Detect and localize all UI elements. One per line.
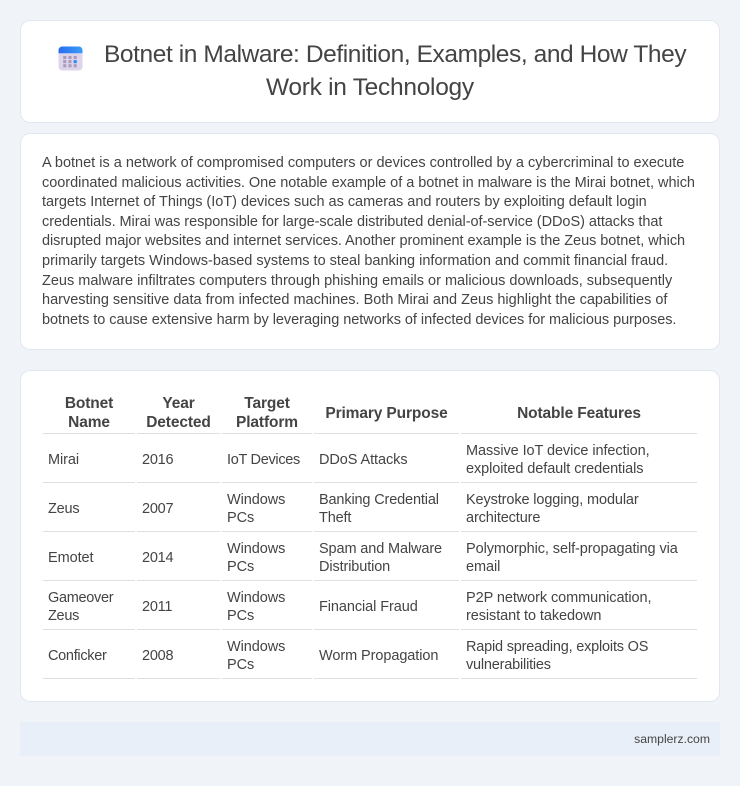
row: Emotet: Windows [227, 541, 285, 557]
row: Mirai [48, 443, 650, 477]
table header: Platform [236, 414, 298, 431]
row: Mirai: Mirai [48, 452, 79, 468]
row: Gameover Zeus: P2P network communication, [466, 590, 651, 606]
table header: Target [244, 395, 290, 412]
footer [20, 722, 720, 756]
row: Zeus: architecture [466, 510, 540, 526]
row: Conficker [48, 639, 648, 673]
row: Conficker: Windows [227, 639, 285, 655]
row: Zeus: Keystroke logging, modular [466, 492, 639, 508]
table header: Notable Features [517, 405, 641, 422]
row: Gameover Zeus: resistant to takedown [466, 608, 601, 624]
title: Work in Technology [266, 74, 474, 101]
footer credit: samplerz.com [634, 732, 710, 746]
row: Zeus: Windows [227, 492, 285, 508]
text block: botnet description: Zeus malware infiltrates computers through phishing emails or malicious downloads, subsequently [42, 273, 672, 289]
row: Gameover Zeus: Zeus [48, 608, 79, 624]
text block: botnet description: botnets to cause extensive harm by leveraging networks of infected devices for malicious purposes. [42, 312, 676, 328]
row: Mirai: Massive IoT device infection, [466, 443, 650, 459]
row: Emotet [48, 541, 678, 575]
row: Emotet: 2014 [142, 550, 173, 566]
table header: Detected [146, 414, 211, 431]
panel: botnet table [20, 370, 720, 702]
row: Emotet: Emotet [48, 550, 93, 566]
row: Gameover Zeus [48, 590, 651, 624]
row: Conficker: Rapid spreading, exploits OS [466, 639, 648, 655]
row: Emotet: Polymorphic, self-propagating via [466, 541, 678, 557]
row: Emotet: Spam and Malware [319, 541, 442, 557]
row: Conficker: vulnerabilities [466, 657, 551, 673]
title: Botnet in Malware: Definition, Examples, and How They [104, 41, 686, 68]
text block: botnet description: A botnet is a network of compromised computers or devices controlled by a cybercriminal to execute [42, 155, 684, 171]
row: Gameover Zeus: PCs [227, 608, 254, 624]
row: Emotet: email [466, 559, 500, 575]
table header: Year [162, 395, 195, 412]
row: Mirai: exploited default credentials [466, 461, 643, 477]
text block: botnet description: primarily targets Windows-based systems to steal banking information and commit financial fraud. [42, 253, 668, 269]
row: Gameover Zeus: 2011 [142, 599, 172, 615]
text block: botnet description: disrupted major websites and internet services. Another prominent example is the Zeus botnet, which [42, 233, 685, 249]
text block: botnet description: credentials. Mirai was responsible for large-scale distributed denial-of-service (DDoS) attacks that [42, 214, 662, 230]
table header: Botnet [65, 395, 113, 412]
row: Gameover Zeus: Windows [227, 590, 285, 606]
row: Zeus: 2007 [142, 501, 173, 517]
row: Mirai: IoT Devices [227, 452, 300, 468]
panel: title card [20, 20, 720, 123]
title [104, 41, 686, 101]
row: Conficker: 2008 [142, 648, 173, 664]
row: Zeus: PCs [227, 510, 254, 526]
row: Zeus [48, 492, 639, 526]
table header: Name [68, 414, 110, 431]
table header [65, 395, 641, 431]
row: Conficker: PCs [227, 657, 254, 673]
row: Gameover Zeus: Gameover [48, 590, 113, 606]
icon: calendar [58, 46, 82, 70]
row: Gameover Zeus: Financial Fraud [319, 599, 418, 615]
row: Emotet: Distribution [319, 559, 390, 575]
row: Conficker: Worm Propagation [319, 648, 438, 664]
row: Zeus: Theft [319, 510, 351, 526]
text block: botnet description [42, 155, 695, 328]
row: Conficker: Conficker [48, 648, 107, 664]
row: Mirai: DDoS Attacks [319, 452, 408, 468]
row: Zeus: Zeus [48, 501, 79, 517]
row: Mirai: 2016 [142, 452, 173, 468]
row: Zeus: Banking Credential [319, 492, 439, 508]
text block: botnet description: harvesting sensitive data from infected machines. Both Mirai and Zeus highlight the capabilities of [42, 292, 667, 308]
panel: description [20, 133, 720, 350]
table header: Primary Purpose [325, 405, 448, 422]
text block: botnet description: coordinated malicious activities. One notable example of a botnet in malware is the Mirai botnet, which [42, 175, 695, 191]
text block: botnet description: targets Internet of Things (IoT) devices such as cameras and routers by exploiting default login [42, 194, 647, 210]
row: Emotet: PCs [227, 559, 254, 575]
